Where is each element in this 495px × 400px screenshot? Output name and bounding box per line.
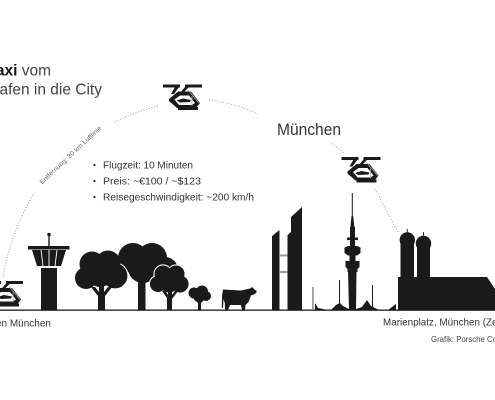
city label: München [277, 120, 341, 139]
bullet list: Reisegeschwindigkeit: ~200 km/h [103, 192, 254, 204]
air taxi: top [163, 84, 202, 110]
skyscrapers [272, 207, 302, 310]
ground line [0, 310, 495, 311]
control tower [28, 233, 70, 310]
trees [75, 243, 211, 310]
title [0, 62, 102, 98]
cow [222, 287, 257, 310]
air taxi: airport [0, 281, 23, 306]
front right tree [150, 265, 189, 310]
large back tree [118, 243, 178, 310]
bullet list [93, 160, 254, 204]
flight path: dotted arc [3, 100, 398, 277]
Frauenkirche [398, 229, 495, 310]
left tree [75, 250, 128, 310]
small tree [188, 286, 211, 310]
bullet list: Flugzeit: 10 Minuten [103, 160, 193, 172]
air taxi: Munich [342, 157, 380, 182]
distance label: Entfernung: 30 km Luftlinie [39, 125, 104, 186]
Olympic tower and tents [312, 193, 396, 310]
bullet list: Preis: ~€100 / ~$123 [103, 176, 201, 188]
